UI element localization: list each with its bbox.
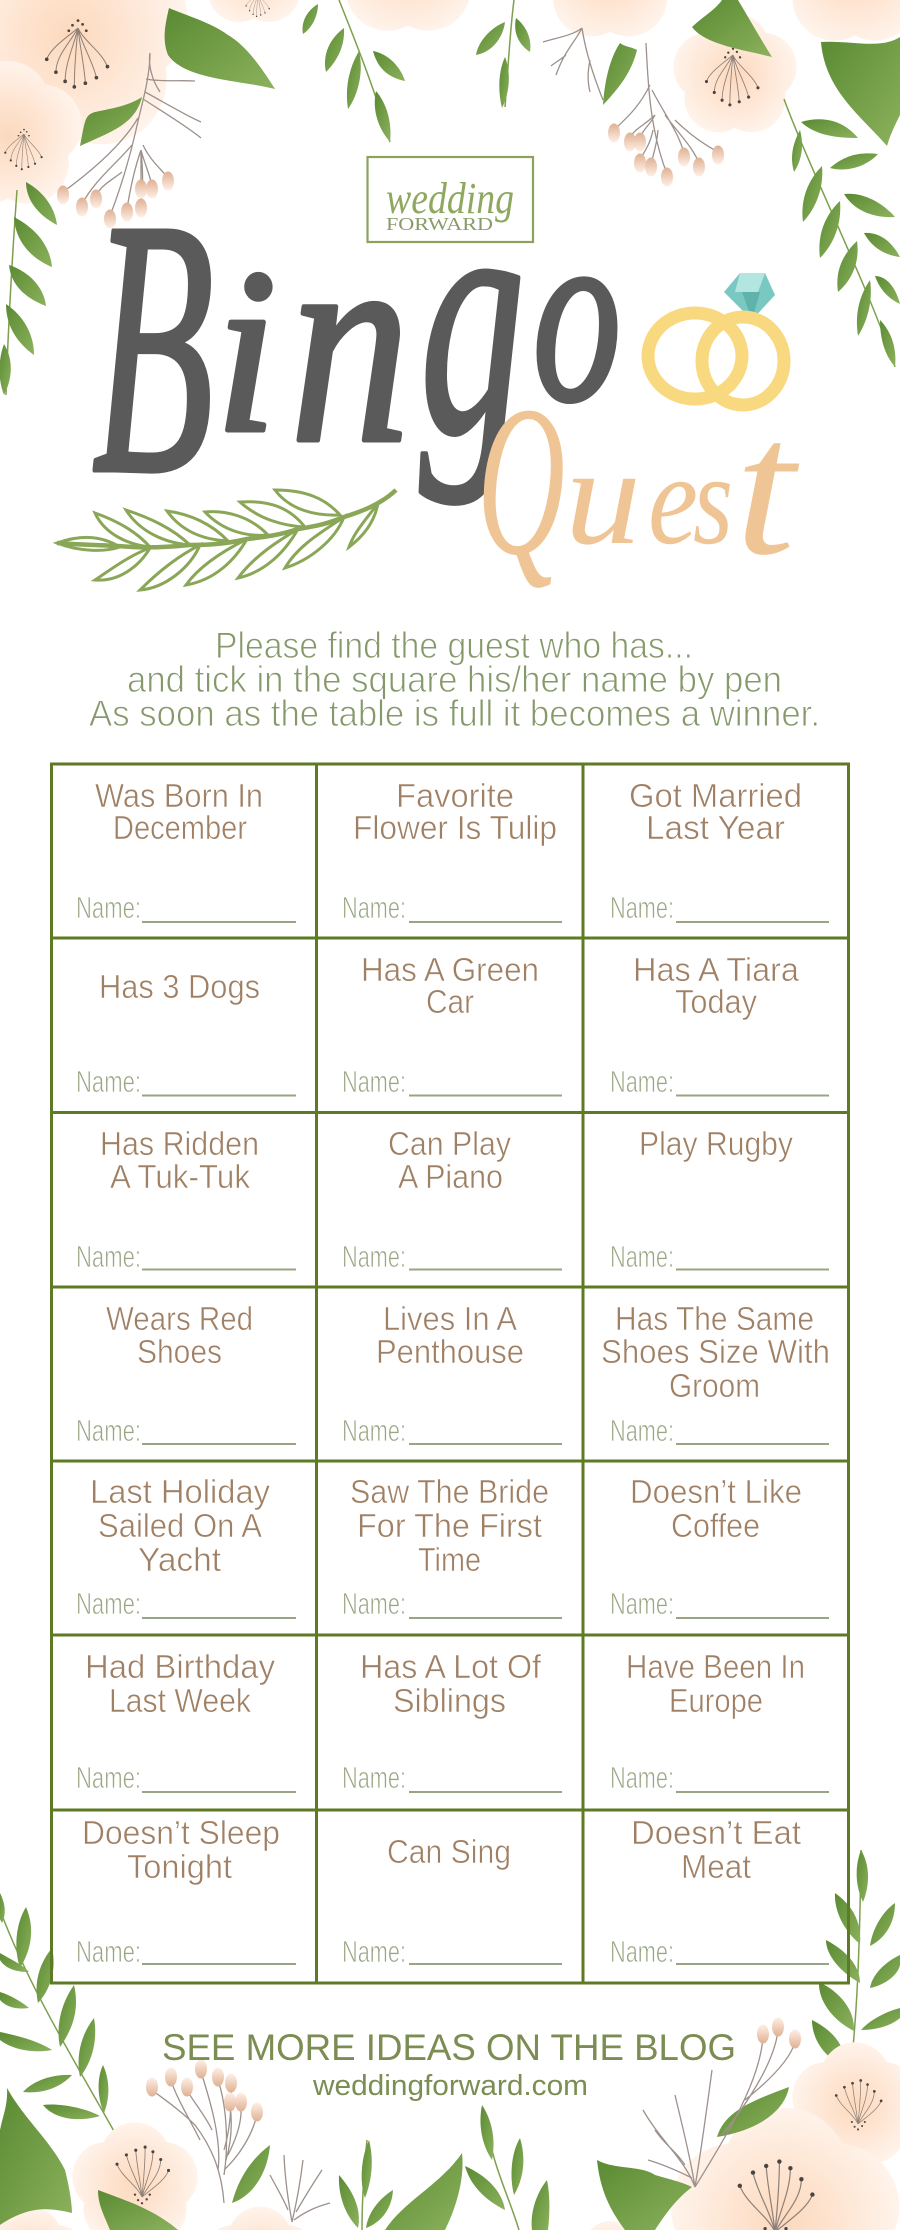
name labels: Name: xyxy=(342,890,406,925)
cell prompts: Coffee xyxy=(671,1507,760,1544)
name labels: Name: xyxy=(76,1934,141,1969)
cell prompts: Shoes xyxy=(137,1333,222,1370)
twig with buds: bottom left xyxy=(146,2060,263,2203)
cell prompts: Shoes Size With xyxy=(601,1333,830,1370)
name labels: Name: xyxy=(610,1760,674,1795)
name labels: Name: xyxy=(342,1586,406,1621)
buds: bottom right xyxy=(757,2018,801,2048)
flower: bottom left xyxy=(72,2122,198,2230)
cell prompts: Was Born In xyxy=(95,777,263,814)
title: Quest: e xyxy=(648,428,698,572)
cell prompts: Sailed On A xyxy=(98,1507,262,1544)
cell prompts: Has A Tiara xyxy=(633,951,800,988)
name labels: Name: xyxy=(610,1586,674,1621)
cell prompts: Doesn’t Eat xyxy=(631,1814,801,1851)
name labels: Name: xyxy=(610,1934,674,1969)
cell prompts: A Piano xyxy=(398,1158,503,1195)
cell prompts: Can Sing xyxy=(387,1833,511,1870)
icon: outlined laurel branch xyxy=(57,490,396,590)
cell prompts: Lives In A xyxy=(383,1300,517,1337)
flower: top centre-right xyxy=(541,0,679,36)
flower: top mid cap xyxy=(332,0,484,31)
cell prompts: Have Been In xyxy=(626,1648,805,1685)
logo: wedding forward: wedding xyxy=(386,174,514,223)
flower: top-right corner xyxy=(779,0,900,41)
sprig: bottom left xyxy=(0,1893,115,2133)
leaves: top large xyxy=(80,0,900,146)
title: Quest: Q xyxy=(477,361,565,600)
title: Quest: u xyxy=(565,419,641,574)
cell prompts: Groom xyxy=(669,1367,760,1404)
sprig: bottom right xyxy=(812,1850,900,2068)
flower: top centre-left xyxy=(198,0,310,22)
sprig: top centre-right xyxy=(476,0,530,108)
name labels xyxy=(76,890,674,1969)
title: Bingo: i xyxy=(215,221,277,481)
intro text: and tick in the square his/her name by pen xyxy=(127,659,782,700)
cell prompts xyxy=(82,777,830,1885)
cell prompts: Has 3 Dogs xyxy=(99,968,260,1005)
footer call to action: SEE MORE IDEAS ON THE BLOG xyxy=(162,2027,736,2068)
cell prompts: Wears Red xyxy=(106,1300,253,1337)
name labels: Name: xyxy=(342,1413,406,1448)
cell prompts: Had Birthday xyxy=(85,1648,275,1685)
name labels: Name: xyxy=(610,1239,674,1274)
name labels: Name: xyxy=(76,1760,141,1795)
cell prompts: For The First xyxy=(357,1507,542,1544)
cell prompts: Meat xyxy=(681,1848,751,1885)
flower: bottom centre xyxy=(563,2221,657,2230)
logo: wedding forward: FORWARD xyxy=(386,214,493,234)
cell prompts: December xyxy=(113,809,247,846)
cell prompts: Can Play xyxy=(388,1125,511,1162)
cell prompts: Siblings xyxy=(393,1682,506,1719)
cell prompts: Today xyxy=(675,983,757,1020)
cell prompts: Has The Same xyxy=(615,1300,814,1337)
logo: wedding forward xyxy=(368,157,533,242)
sprig: top centre-left xyxy=(303,0,405,142)
footer url: weddingforward.com xyxy=(312,2070,588,2102)
cell prompts: Has Ridden xyxy=(100,1125,259,1162)
title: Bingo: B xyxy=(92,145,214,549)
title: Quest: t xyxy=(735,380,800,596)
name labels: Name: xyxy=(342,1760,406,1795)
name lines xyxy=(142,922,829,1964)
bottom floral border xyxy=(0,1850,900,2230)
cell prompts: Tonight xyxy=(127,1848,232,1885)
cell prompts: Doesn’t Sleep xyxy=(82,1814,280,1851)
sprig: bottom centre small xyxy=(339,2140,393,2230)
cell prompts: Penthouse xyxy=(376,1333,524,1370)
cell prompts: Has A Green xyxy=(361,951,539,988)
cell prompts: Europe xyxy=(669,1682,763,1719)
name labels: Name: xyxy=(610,1413,674,1448)
cell prompts: Favorite xyxy=(396,777,514,814)
cell prompts: Last Year xyxy=(646,809,785,846)
name labels: Name: xyxy=(76,1064,141,1099)
title: Bingo: o xyxy=(533,173,621,455)
flower: bottom right upper xyxy=(792,2042,900,2163)
name labels: Name: xyxy=(342,1934,406,1969)
cell prompts: Got Married xyxy=(629,777,802,814)
flower: bottom centre-left xyxy=(202,2207,318,2230)
flower: left lower xyxy=(0,61,82,204)
cell prompts: Car xyxy=(426,983,474,1020)
cell prompts: Yacht xyxy=(138,1541,221,1578)
title: Bingo: g xyxy=(420,128,525,505)
name labels: Name: xyxy=(610,890,674,925)
name labels: Name: xyxy=(342,1064,406,1099)
twig with buds: top left xyxy=(57,53,201,228)
flower: bottom right large xyxy=(671,2108,899,2230)
sprig: bottom centre tall xyxy=(465,2105,549,2230)
intro text xyxy=(89,625,820,734)
flower: upper right xyxy=(673,13,797,132)
twig: bottom centre bare xyxy=(270,2155,330,2222)
cell prompts: Last Week xyxy=(109,1682,251,1719)
name labels: Name: xyxy=(76,890,141,925)
cell prompts: Saw The Bride xyxy=(350,1473,549,1510)
table grid xyxy=(52,764,848,1983)
cell prompts: Time xyxy=(418,1541,481,1578)
intro text: As soon as the table is full it becomes a winner. xyxy=(89,693,820,734)
twig with buds: top right xyxy=(608,43,724,186)
title: Quest: s xyxy=(693,428,733,572)
title: Bingo: n xyxy=(290,182,410,503)
twig: bottom right xyxy=(643,2030,795,2187)
top floral border xyxy=(0,0,900,395)
twig: top right bare xyxy=(543,28,603,100)
cell prompts: Play Rugby xyxy=(639,1125,793,1162)
name labels: Name: xyxy=(610,1064,674,1099)
cell prompts: Last Holiday xyxy=(90,1473,270,1510)
sprig: right side xyxy=(784,99,900,367)
intro text: Please find the guest who has... xyxy=(215,625,693,666)
leaves: bottom right xyxy=(597,2087,789,2230)
icon: wedding rings with diamond xyxy=(648,273,784,405)
name labels: Name: xyxy=(342,1239,406,1274)
flower: top-left large xyxy=(0,0,188,144)
name labels: Name: xyxy=(76,1413,141,1448)
cell prompts: Has A Lot Of xyxy=(360,1648,542,1685)
name labels: Name: xyxy=(76,1239,141,1274)
leaves: bottom xyxy=(0,2088,463,2230)
cell prompts: Doesn’t Like xyxy=(630,1473,802,1510)
cell prompts: Flower Is Tulip xyxy=(353,809,557,846)
bingo table xyxy=(52,764,848,1983)
cell prompts: A Tuk-Tuk xyxy=(110,1158,250,1195)
flower: bottom corner xyxy=(0,2207,88,2230)
name labels: Name: xyxy=(76,1586,141,1621)
sprig: left side xyxy=(0,182,57,395)
